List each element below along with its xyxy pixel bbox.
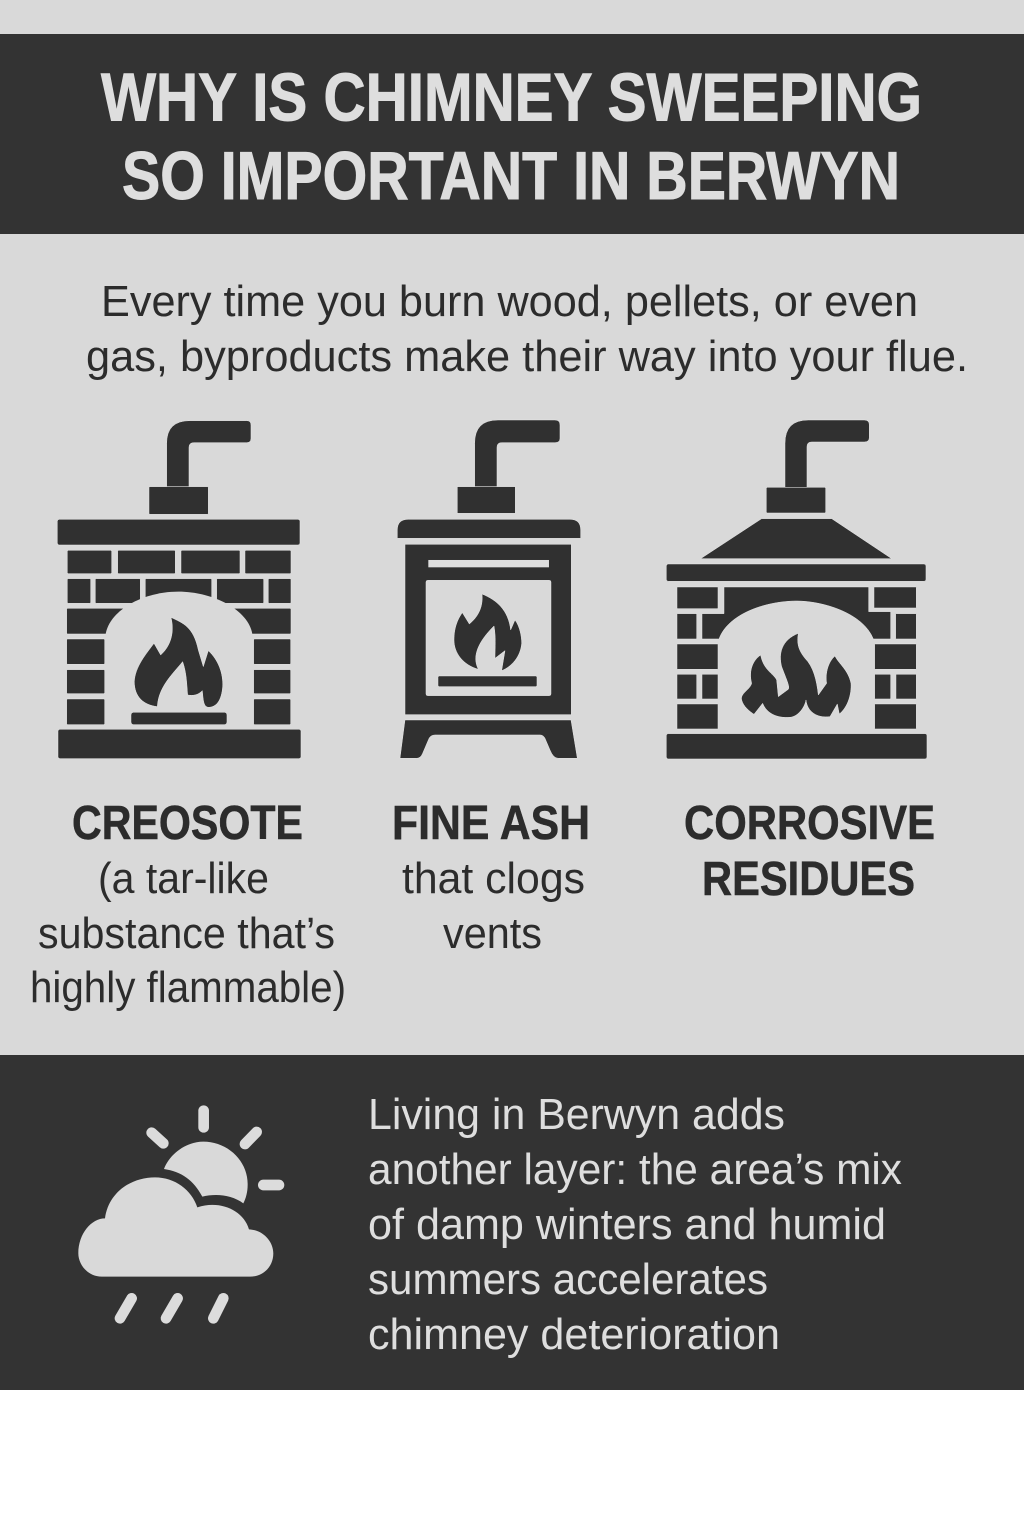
- label: corrosive residues: RESIDUES: [702, 853, 915, 906]
- panel: climate: [0, 1055, 1024, 1390]
- label: corrosive residues: [684, 797, 935, 906]
- climate text: Living in Berwyn adds: [368, 1090, 785, 1139]
- label: fine ash: that clogs: [402, 854, 585, 903]
- title banner: [0, 34, 1024, 234]
- label: corrosive residues: CORROSIVE: [684, 797, 935, 850]
- label: creosote: highly flammable): [30, 963, 346, 1012]
- climate text: [368, 1090, 902, 1359]
- intro text: [86, 277, 968, 381]
- climate text: summers accelerates: [368, 1255, 768, 1304]
- label: creosote: CREOSOTE: [72, 797, 303, 850]
- label: fine ash: [392, 797, 590, 958]
- label: fine ash: vents: [443, 909, 542, 958]
- title banner: SO IMPORTANT IN BERWYN: [122, 138, 900, 214]
- intro text: Every time you burn wood, pellets, or even: [101, 277, 918, 326]
- label: creosote: substance that’s: [38, 909, 335, 958]
- icon: hooded brick fireplace: [666, 420, 927, 759]
- label: creosote: [30, 797, 346, 1012]
- climate text: chimney deterioration: [368, 1310, 780, 1359]
- label: fine ash: FINE ASH: [392, 797, 590, 850]
- climate text: of damp winters and humid: [368, 1200, 886, 1249]
- icon: cloud, sun and rain: [78, 1111, 279, 1318]
- intro text: gas, byproducts make their way into your flue.: [86, 332, 968, 381]
- climate text: another layer: the area’s mix: [368, 1145, 902, 1194]
- label: creosote: (a tar-like: [98, 854, 269, 903]
- icon: wood stove: [397, 420, 581, 758]
- icon: brick fireplace: [57, 421, 301, 759]
